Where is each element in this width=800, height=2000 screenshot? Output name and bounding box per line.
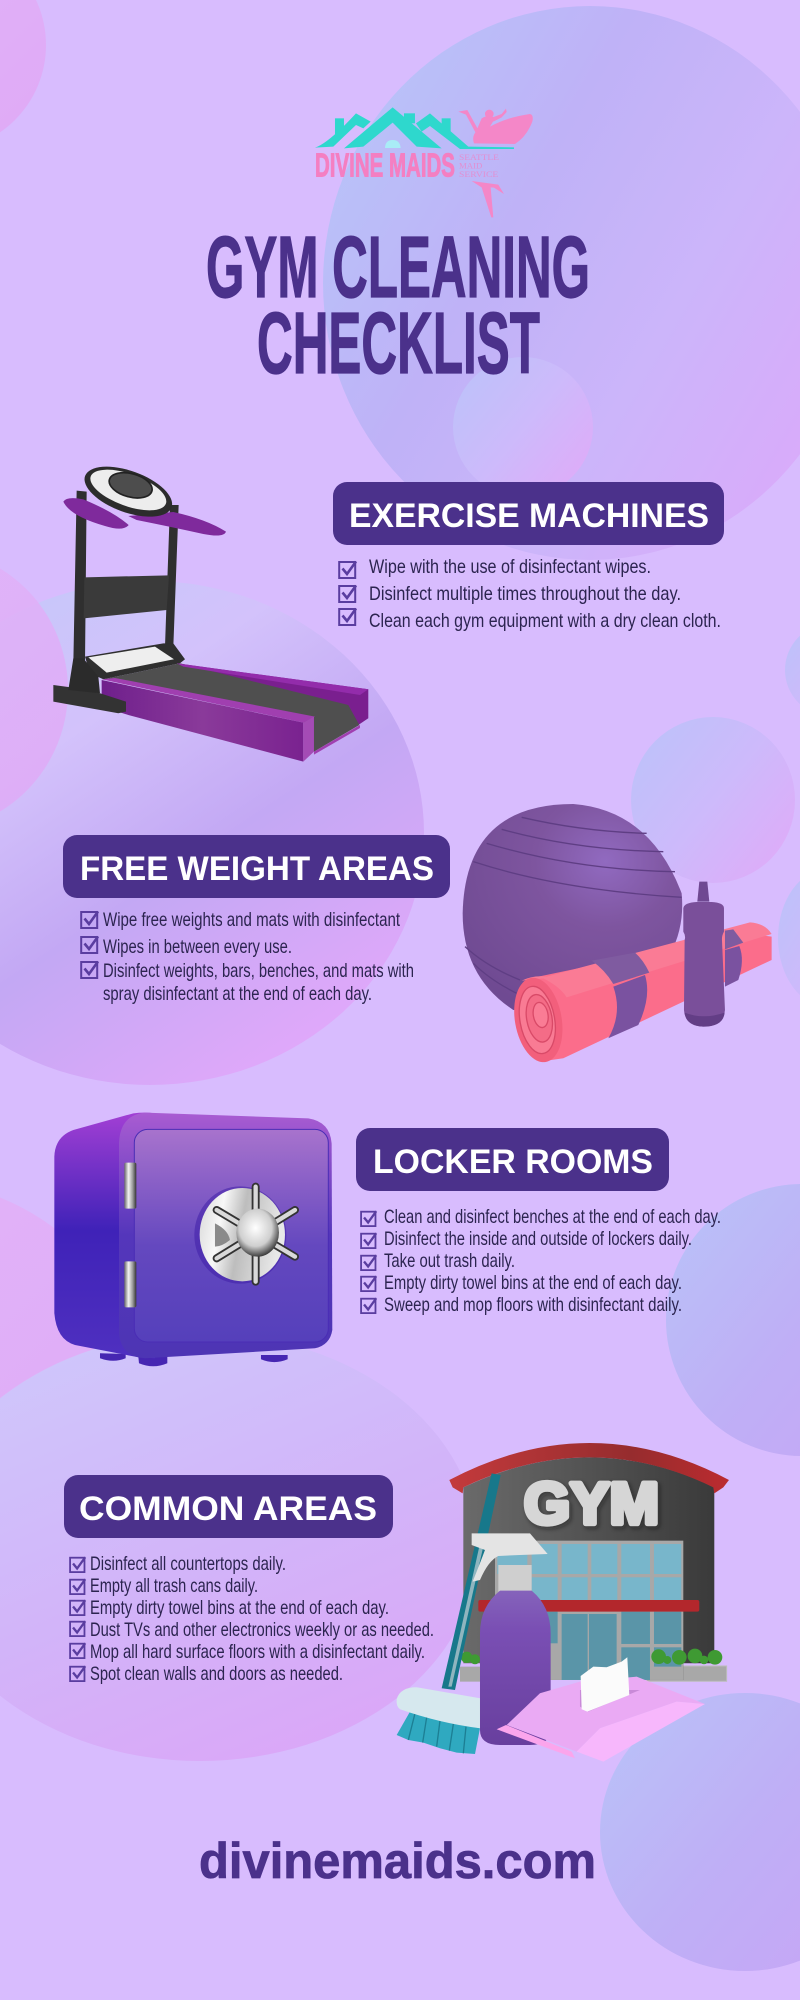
section: free weight areas	[63, 804, 772, 1066]
checklist: common areas: Mop all hard surface floors with a disinfectant daily.	[90, 1641, 425, 1663]
heading panel: locker rooms: LOCKER ROOMS	[373, 1143, 653, 1181]
logo tagline: SERVICE	[459, 169, 498, 179]
mop	[397, 1473, 501, 1754]
checklist: locker rooms: Empty dirty towel bins at the end of each day.	[384, 1272, 682, 1294]
checklist: common areas: Empty all trash cans daily.	[90, 1575, 258, 1597]
checklist: common areas	[70, 1553, 434, 1685]
logo window	[385, 140, 401, 148]
checklist: locker rooms: Disinfect the inside and outside of lockers daily.	[384, 1228, 692, 1250]
logo wordmark: DIVINE MAIDS	[315, 147, 455, 184]
wipes pack	[497, 1657, 705, 1762]
website footer: divinemaids.com	[199, 1833, 596, 1889]
illustration: exercise ball, mat and bottle	[463, 804, 772, 1066]
illustration: gym building and cleaning supplies	[397, 1443, 729, 1762]
logo tagline: SEATTLE	[459, 152, 499, 162]
water bottle	[683, 882, 725, 1027]
checklist: common areas: Spot clean walls and doors as needed.	[90, 1663, 343, 1685]
heading panel: exercise machines: EXERCISE MACHINES	[349, 497, 709, 535]
heading panel: common areas	[64, 1475, 393, 1538]
section: common areas	[64, 1443, 729, 1762]
illustration: safe	[54, 1113, 332, 1366]
heading panel: exercise machines	[333, 482, 724, 545]
checklist: common areas: Disinfect all countertops daily.	[90, 1553, 286, 1575]
checklist: common areas: Dust TVs and other electronics weekly or as needed.	[90, 1619, 434, 1641]
checklist: exercise machines: Clean each gym equipment with a dry clean cloth.	[369, 610, 721, 632]
illustration: treadmill	[53, 457, 368, 762]
title: CHECKLIST	[257, 295, 540, 392]
logo fairy	[458, 109, 533, 217]
checklist: free weight areas: Wipe free weights and mats with disinfectant	[103, 909, 400, 931]
heading panel: free weight areas	[63, 835, 450, 898]
checklist: common areas: Empty dirty towel bins at the end of each day.	[90, 1597, 389, 1619]
logo: Divine Maids	[315, 107, 533, 217]
heading panel: free weight areas: FREE WEIGHT AREAS	[80, 850, 434, 888]
heading panel: locker rooms	[356, 1128, 669, 1191]
title	[206, 219, 590, 392]
checklist: locker rooms: Take out trash daily.	[384, 1250, 515, 1272]
checklist: exercise machines: Disinfect multiple times throughout the day.	[369, 583, 681, 605]
checklist: free weight areas: spray disinfectant at the end of each day.	[103, 983, 372, 1005]
logo roofs	[315, 107, 514, 149]
logo tagline: MAID	[459, 161, 482, 171]
checklist: locker rooms: Sweep and mop floors with disinfectant daily.	[384, 1294, 682, 1316]
checklist: free weight areas: Disinfect weights, bars, benches, and mats with	[103, 960, 414, 982]
checklist: exercise machines	[339, 556, 721, 632]
section: locker rooms	[54, 1113, 721, 1366]
logo tagline	[459, 152, 499, 179]
spray bottle	[472, 1533, 551, 1745]
checklist: free weight areas: Wipes in between every use.	[103, 936, 292, 958]
gym sign: GYM	[524, 1472, 659, 1537]
rolled mat	[508, 922, 772, 1066]
checklist: locker rooms	[361, 1206, 721, 1316]
heading panel: common areas: COMMON AREAS	[79, 1490, 377, 1528]
checklist: free weight areas	[81, 909, 414, 1005]
gym building	[449, 1443, 729, 1682]
exercise ball	[463, 804, 682, 1010]
section: exercise machines	[53, 457, 724, 762]
checklist: exercise machines: Wipe with the use of disinfectant wipes.	[369, 556, 651, 578]
